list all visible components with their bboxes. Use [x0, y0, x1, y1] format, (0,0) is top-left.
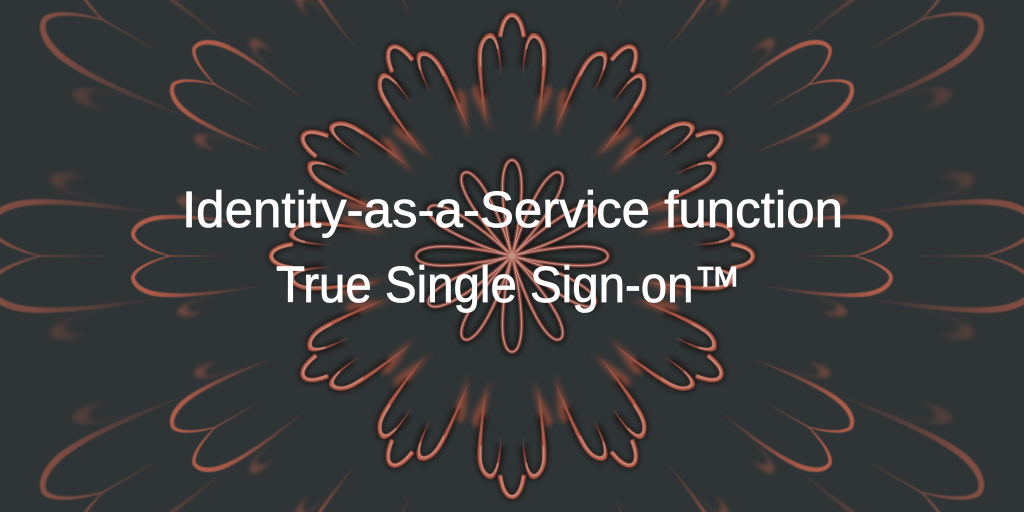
middle ring petals [271, 15, 753, 497]
central flower petals [416, 160, 608, 352]
second ring of petals [131, 0, 893, 512]
title [182, 181, 843, 313]
middle ring light highlights [272, 16, 752, 496]
middle ring dark halo [271, 15, 753, 497]
middle ring soft glows [341, 85, 683, 427]
title: True Single Sign-on™ [276, 256, 741, 313]
title: Identity-as-a-Service function [182, 181, 843, 238]
central flower halo [416, 160, 608, 352]
central flower highlights [416, 160, 608, 352]
